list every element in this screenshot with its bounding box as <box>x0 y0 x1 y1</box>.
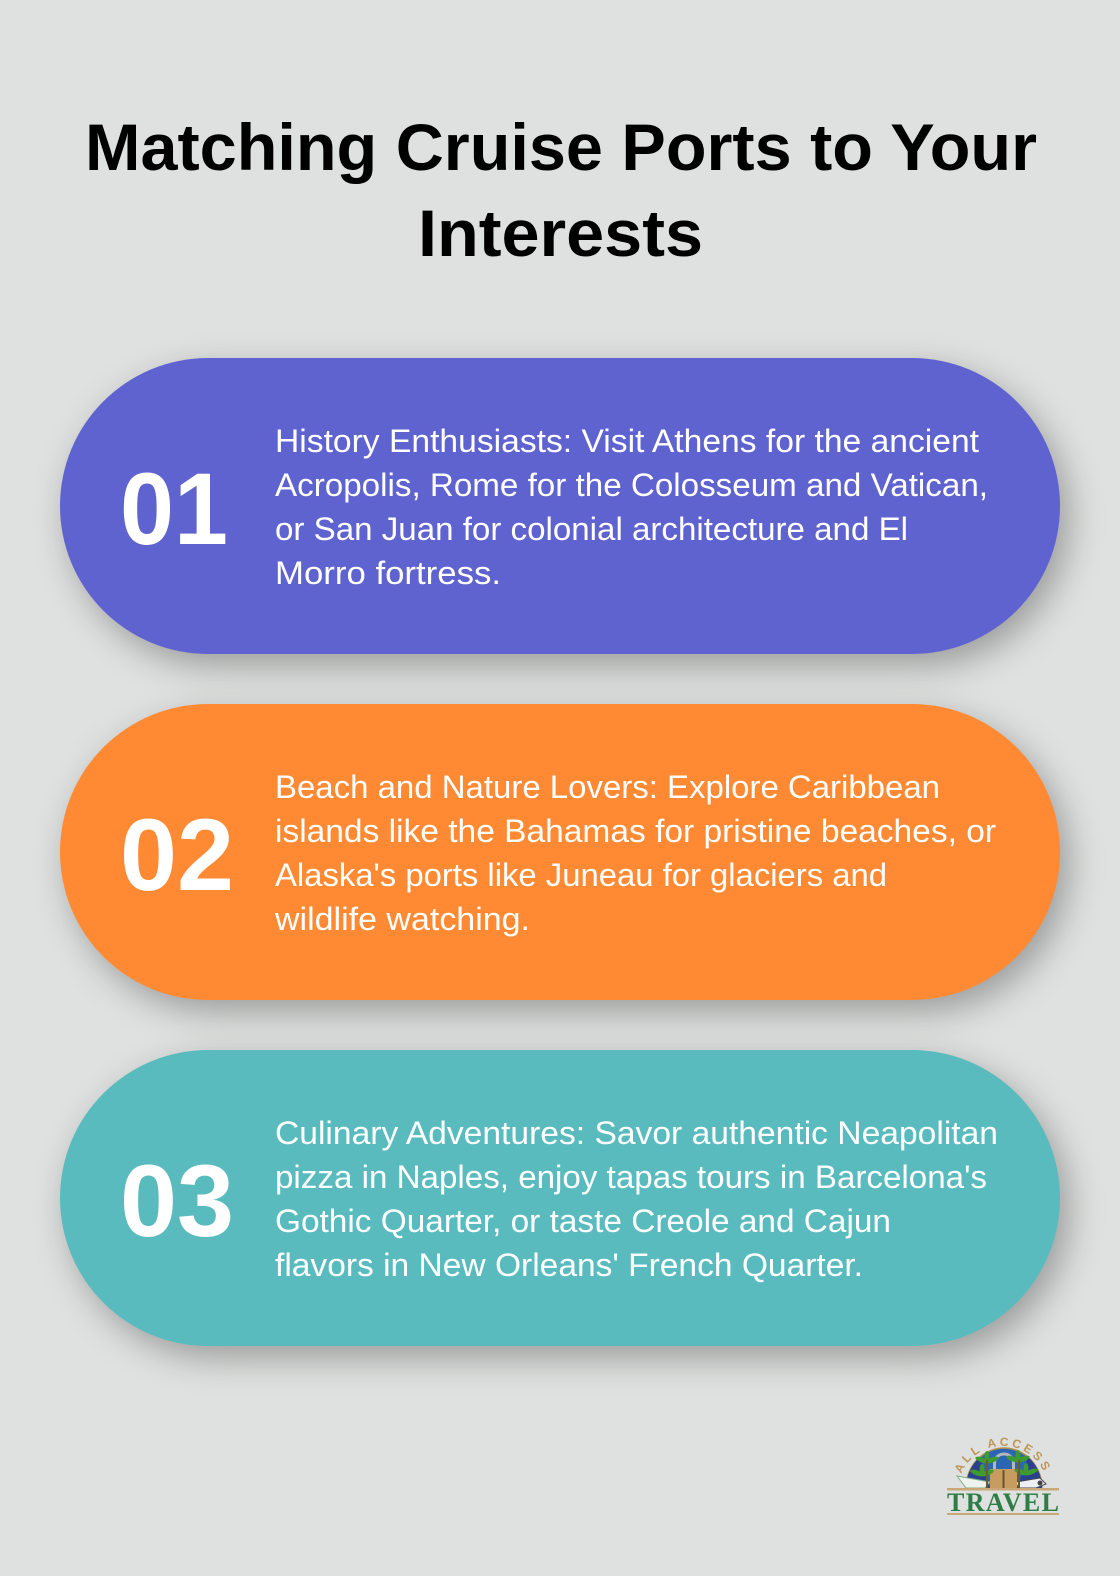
number 02: 02 <box>120 798 234 912</box>
text block: beach <box>274 769 996 937</box>
text block: beach: islands like the Bahamas for pristine beaches, or <box>275 813 996 849</box>
title: Matching Cruise Ports to Your <box>85 110 1037 184</box>
pill background teal <box>60 1050 1060 1346</box>
panel: beach and nature lovers <box>60 704 1060 1000</box>
logo palms <box>970 1450 1038 1488</box>
text block: history: Morro fortress. <box>275 555 501 591</box>
text block: history: Acropolis, Rome for the Colosseum and Vatican, <box>275 467 988 503</box>
number 01: 01 <box>120 452 228 566</box>
icon: all access travel logo <box>947 1438 1059 1517</box>
pill background purple <box>60 358 1060 654</box>
text block: history <box>275 423 988 591</box>
text block: history: History Enthusiasts: Visit Athens for the ancient <box>275 423 979 459</box>
number 03: 03 <box>120 1144 234 1258</box>
text block: culinary: Gothic Quarter, or taste Creole and Cajun <box>275 1203 891 1239</box>
text block: culinary <box>275 1115 998 1283</box>
icon: all access travel logo: ALL ACCESS <box>956 1438 1050 1474</box>
logo boats <box>957 1476 1046 1488</box>
text block: culinary: pizza in Naples, enjoy tapas tours in Barcelona's <box>275 1159 987 1195</box>
panel: history enthusiasts <box>60 358 1060 654</box>
panel: culinary adventures <box>60 1050 1060 1346</box>
text block: beach: wildlife watching. <box>274 901 530 937</box>
title: Interests <box>418 196 703 270</box>
logo padlock <box>990 1454 1017 1489</box>
logo wordmark: TRAVEL <box>947 1488 1059 1517</box>
text block: culinary: flavors in New Orleans' French Quarter. <box>275 1247 863 1283</box>
title <box>85 110 1037 270</box>
text block: culinary: Culinary Adventures: Savor authentic Neapolitan <box>275 1115 998 1151</box>
text block: beach: Beach and Nature Lovers: Explore Caribbean <box>275 769 940 805</box>
pill background orange <box>60 704 1060 1000</box>
logo bars <box>947 1488 1059 1490</box>
logo dome <box>966 1448 1042 1488</box>
text block: history: or San Juan for colonial architecture and El <box>275 511 908 547</box>
logo arc text <box>959 1446 1047 1488</box>
text block: beach: Alaska's ports like Juneau for glaciers and <box>275 857 887 893</box>
